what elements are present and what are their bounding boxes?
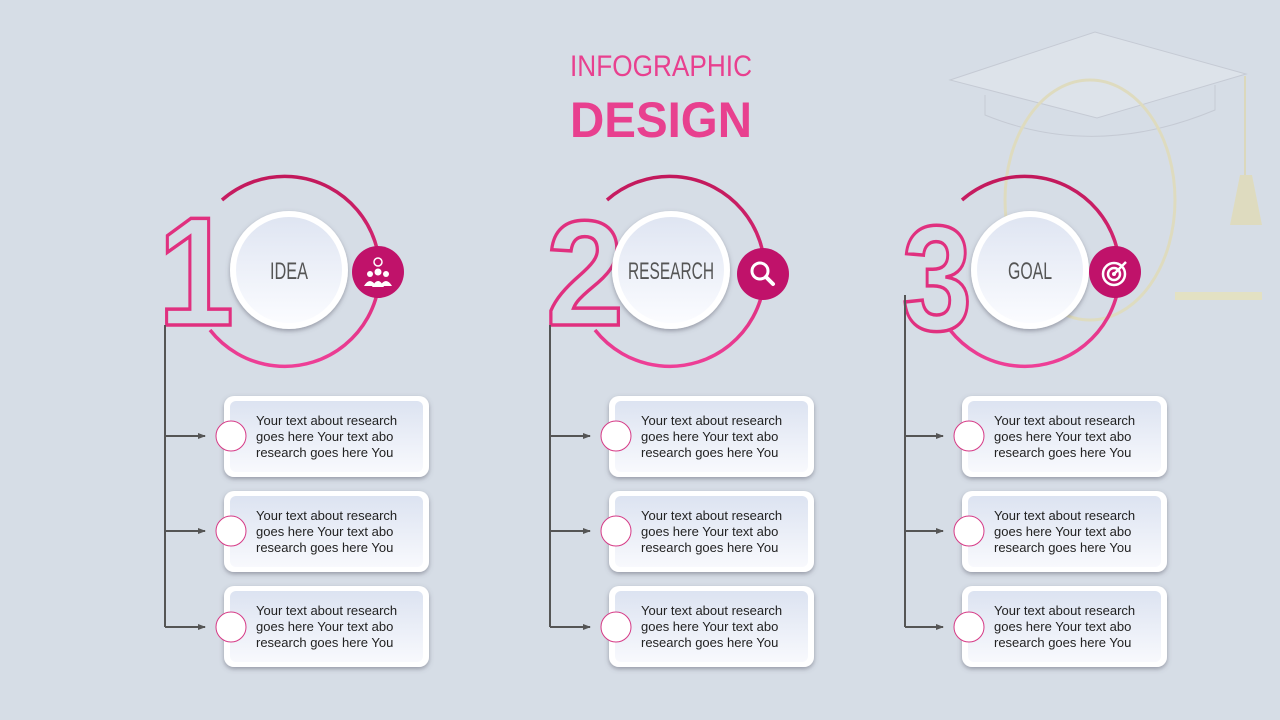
text boxes: research goes here You [994,445,1131,460]
text boxes: Your text about research [994,413,1135,428]
ring arc [950,176,1120,366]
text boxes: research goes here You [256,445,393,460]
icon: team idea [352,246,404,298]
number 3: 3 [902,194,972,362]
circle: RESEARCH: RESEARCH [628,258,714,285]
text boxes: goes here Your text abo [994,524,1131,539]
connector lines [165,325,205,627]
text boxes: Your text about research [994,508,1135,523]
title [570,50,752,148]
connector lines [905,295,943,627]
text boxes: Your text about research [641,508,782,523]
text boxes: Your text about research [256,603,397,618]
text boxes [216,396,429,667]
text boxes: research goes here You [256,635,393,650]
text boxes [601,396,814,667]
text boxes: Your text about research [994,603,1135,618]
text boxes: goes here Your text abo [256,619,393,634]
circle: GOAL [971,211,1089,329]
connector lines [550,325,590,627]
text boxes: research goes here You [256,540,393,555]
text boxes: goes here Your text abo [256,524,393,539]
text boxes: goes here Your text abo [641,429,778,444]
ring arc [595,176,765,366]
text boxes: goes here Your text abo [994,429,1131,444]
text boxes: goes here Your text abo [641,524,778,539]
title: DESIGN [570,92,752,148]
text boxes: research goes here You [641,635,778,650]
text boxes: goes here Your text abo [256,429,393,444]
text boxes: research goes here You [994,540,1131,555]
ring arc [210,176,380,366]
title: INFOGRAPHIC [570,50,752,83]
number 1: 1 [158,185,234,358]
text boxes: research goes here You [641,540,778,555]
text boxes: Your text about research [641,413,782,428]
text boxes: research goes here You [641,445,778,460]
icon: magnifier [737,248,789,300]
panel: idea [158,176,429,667]
text boxes [954,396,1167,667]
circle: IDEA [230,211,348,329]
text boxes: Your text about research [256,413,397,428]
text boxes: goes here Your text abo [994,619,1131,634]
circle: IDEA: IDEA [270,258,308,285]
text boxes: research goes here You [994,635,1131,650]
panel: goal [902,176,1167,667]
circle: RESEARCH [612,211,730,329]
text boxes: Your text about research [256,508,397,523]
number 2: 2 [546,189,624,357]
text boxes: Your text about research [641,603,782,618]
text boxes: goes here Your text abo [641,619,778,634]
panel: research [546,176,814,667]
circle: GOAL: GOAL [1008,258,1052,285]
icon: target [1089,246,1141,298]
watermark: graduation cap [950,32,1262,320]
